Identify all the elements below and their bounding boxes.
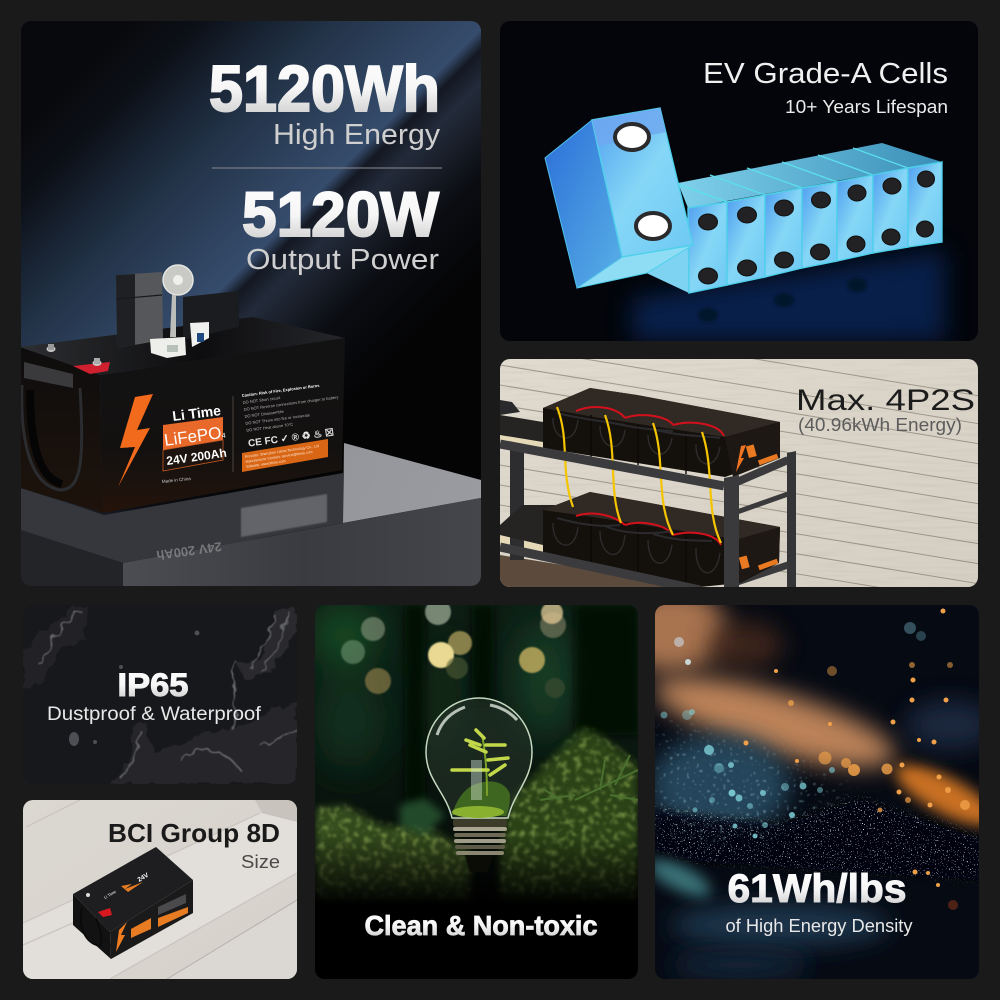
water splash [23, 605, 297, 784]
left splash [23, 606, 88, 690]
droplets [69, 630, 200, 746]
rack subheading: (40.96kWh Energy) [798, 415, 962, 435]
reflective platform [21, 443, 481, 586]
sparkle texture [655, 720, 979, 890]
fan [163, 265, 193, 337]
splash highlights [40, 610, 297, 778]
shelf tops [500, 434, 545, 553]
steps [23, 800, 297, 979]
glass highlights [437, 705, 517, 735]
bokeh lights [341, 599, 566, 698]
warning text: CE FC ✓ ® ♻ ♨ ☒ [247, 427, 335, 450]
back-left post [510, 450, 524, 560]
battery reflection [21, 473, 343, 563]
fridge [116, 272, 163, 348]
top battery row [543, 388, 780, 477]
clouds [617, 588, 1000, 979]
warning text [242, 384, 338, 446]
bottom battery row [543, 492, 780, 587]
glass column [471, 760, 482, 800]
warning text: Caution: Risk of Fire, Explosion or Burns [241, 383, 320, 398]
forest background [315, 605, 638, 979]
teal bokeh dots [660, 622, 926, 838]
fern [452, 730, 508, 795]
monitor [183, 291, 239, 340]
bulb base [453, 818, 507, 872]
bulb inner moss [452, 781, 510, 816]
provider plate: Provider: Shenzhen Litime Technology Co., Ltd [245, 444, 319, 459]
wall grain [500, 359, 978, 587]
floor [500, 555, 700, 587]
density subheading: of High Energy Density [726, 916, 912, 936]
cells heading: EV Grade-A Cells [703, 58, 948, 90]
chemistry label [163, 417, 228, 471]
shelf front rails [500, 444, 724, 590]
chemistry label: LiFePO4 [163, 423, 227, 450]
moss mounds [315, 728, 638, 905]
brand: Li Time [171, 402, 222, 424]
provider plate: Website: www.litime.com [246, 459, 286, 469]
provider plate [242, 439, 328, 472]
reflected text: 24V 200Ah [155, 539, 223, 563]
lightning bolt [118, 394, 153, 487]
chemistry label: 24V 200Ah [165, 446, 228, 468]
IP65 heading: IP65 [118, 667, 188, 703]
platform front face [123, 498, 481, 586]
battery front [100, 338, 345, 513]
cell row top [678, 143, 942, 208]
panel background [23, 800, 297, 979]
made in china: Made in China [162, 476, 191, 484]
panel: BCI group size [23, 800, 297, 979]
orange bokeh dots [744, 608, 970, 910]
warning text: DO NOT Disassemble [244, 409, 285, 419]
chargers [500, 400, 555, 545]
upper right splash [236, 605, 297, 680]
fern on moss [540, 755, 638, 800]
green glow [313, 607, 575, 770]
reflected label [241, 494, 327, 537]
battery [20, 317, 345, 513]
IP65 subheading: Dustproof & Waterproof [47, 704, 262, 725]
cell row fronts [688, 162, 942, 293]
headline: power: 5120W [242, 180, 440, 250]
wall plank lines [500, 340, 980, 604]
panel: energy density [617, 588, 1000, 979]
row of cells [640, 143, 942, 293]
headline: power [242, 190, 440, 275]
back-right post [787, 451, 796, 587]
tree trunks [405, 605, 638, 805]
platform left face [21, 530, 123, 586]
panel background [500, 21, 978, 341]
BCI subheading: Size [241, 852, 280, 872]
density heading: 61Wh/lbs [728, 867, 906, 911]
bottom splash [110, 700, 297, 784]
front post [724, 475, 739, 587]
dark sparkle band base [655, 800, 979, 880]
provider plate: Manufacturer Contact: service@litime.com [245, 450, 313, 464]
light bulb [426, 698, 532, 872]
panel: EV grade cells [500, 21, 978, 341]
battery top [20, 317, 345, 375]
warning text: DO NOT Short circuit [242, 395, 281, 405]
headline: energy: High Energy [273, 119, 441, 151]
terminals [46, 344, 110, 374]
power station [190, 322, 209, 347]
handle [22, 362, 82, 490]
white device [150, 337, 186, 358]
moss texture [315, 725, 638, 905]
headline: energy [210, 63, 440, 150]
small battery [73, 847, 193, 959]
battery side [20, 347, 103, 513]
warning text: DO NOT Throw into fire or incinerate [245, 412, 311, 426]
headline: power: Output Power [246, 244, 439, 276]
warning text: DO NOT Heat above 70°C [246, 422, 294, 433]
panel: high energy battery [20, 21, 481, 586]
cell terminals [698, 171, 934, 284]
warning text: DO NOT Reverse connections from charger to battery [243, 394, 339, 412]
panel background [23, 605, 297, 784]
yellow cables [557, 407, 721, 543]
clean heading: Clean & Non-toxic [364, 910, 598, 941]
bulb glass [426, 698, 532, 818]
headline: energy: 5120Wh [209, 52, 440, 125]
panel: IP65 [23, 605, 297, 784]
appliances [116, 265, 239, 358]
blue reflection [632, 250, 945, 341]
rack heading: Max. 4P2S [796, 384, 975, 417]
cells subheading: 10+ Years Lifespan [785, 97, 948, 117]
BCI heading: BCI Group 8D [108, 818, 280, 848]
large tilted cell [545, 108, 693, 288]
small battery: Li Time [103, 889, 117, 900]
panel background [655, 605, 979, 979]
bottom fade [315, 835, 638, 905]
rear rails [737, 460, 788, 582]
small battery: 24V [136, 872, 151, 884]
red cables [576, 407, 724, 545]
wood wall [500, 359, 978, 587]
black cables [557, 413, 720, 541]
lit platform top [343, 443, 481, 523]
panel background [21, 21, 481, 586]
panel: clean and non-toxic [313, 599, 638, 980]
panel: max 4P2S rack [500, 359, 978, 587]
